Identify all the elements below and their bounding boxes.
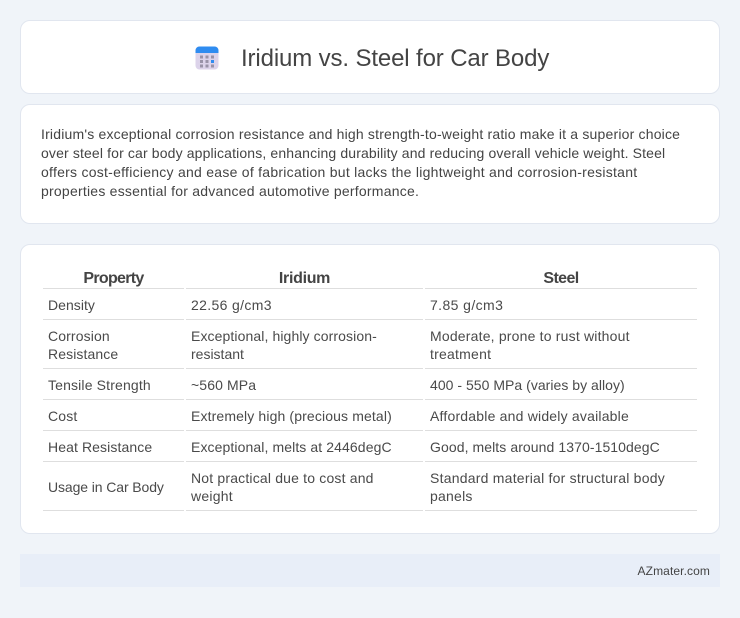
row: density	[43, 297, 697, 320]
row: corrosion resistance: Exceptional, highly corrosion-	[191, 328, 377, 344]
row: density: 22.56 g/cm3	[191, 297, 272, 313]
row: heat resistance	[43, 439, 697, 462]
row: corrosion resistance: resistant	[191, 346, 244, 362]
row: cost: Extremely high (precious metal)	[191, 408, 392, 424]
row: usage in car body: weight	[191, 488, 233, 504]
row: usage in car body: panels	[430, 488, 473, 504]
description text: properties essential for advanced automotive performance.	[41, 183, 419, 199]
row: usage in car body	[43, 470, 697, 511]
row: usage in car body: Standard material for structural body	[430, 470, 665, 486]
table header row: Iridium	[279, 270, 330, 287]
row: tensile strength: Tensile Strength	[48, 377, 151, 393]
title: Iridium vs. Steel for Car Body	[241, 45, 549, 72]
row: corrosion resistance: Resistance	[48, 346, 118, 362]
row: density: 7.85 g/cm3	[430, 297, 503, 313]
description text: Iridium's exceptional corrosion resistance and high strength-to-weight ratio make it a superior choice	[41, 126, 680, 142]
row: heat resistance: Good, melts around 1370-1510degC	[430, 439, 660, 455]
row: cost	[43, 408, 697, 431]
description text: offers cost-efficiency and ease of fabrication but lacks the lightweight and corrosion-resistant	[41, 164, 637, 180]
table header row: Steel	[543, 270, 579, 287]
footer credit: AZmater.com	[638, 564, 710, 578]
row: cost: Cost	[48, 408, 77, 424]
icon: calendar	[196, 46, 218, 70]
row: density: Density	[48, 297, 95, 313]
footer bar	[20, 554, 720, 587]
table header row: Property	[83, 270, 144, 287]
description text	[41, 126, 680, 199]
row: tensile strength: 400 - 550 MPa (varies by alloy)	[430, 377, 625, 393]
table header row	[43, 270, 697, 289]
row: cost: Affordable and widely available	[430, 408, 629, 424]
description text: over steel for car body applications, enhancing durability and reducing overall vehicle weight. Steel	[41, 145, 665, 161]
row: corrosion resistance	[43, 328, 697, 369]
row: usage in car body: Usage in Car Body	[48, 479, 164, 495]
header panel	[20, 20, 720, 94]
row: corrosion resistance: Moderate, prone to rust without	[430, 328, 630, 344]
row: tensile strength	[43, 377, 697, 400]
row: tensile strength: ~560 MPa	[191, 377, 256, 393]
panel: comparison table	[20, 244, 720, 534]
comparison table	[43, 270, 697, 511]
row: heat resistance: Heat Resistance	[48, 439, 152, 455]
row: usage in car body: Not practical due to cost and	[191, 470, 374, 486]
row: corrosion resistance: treatment	[430, 346, 491, 362]
row: heat resistance: Exceptional, melts at 2446degC	[191, 439, 392, 455]
row: corrosion resistance: Corrosion	[48, 328, 110, 344]
panel: description	[20, 104, 720, 224]
